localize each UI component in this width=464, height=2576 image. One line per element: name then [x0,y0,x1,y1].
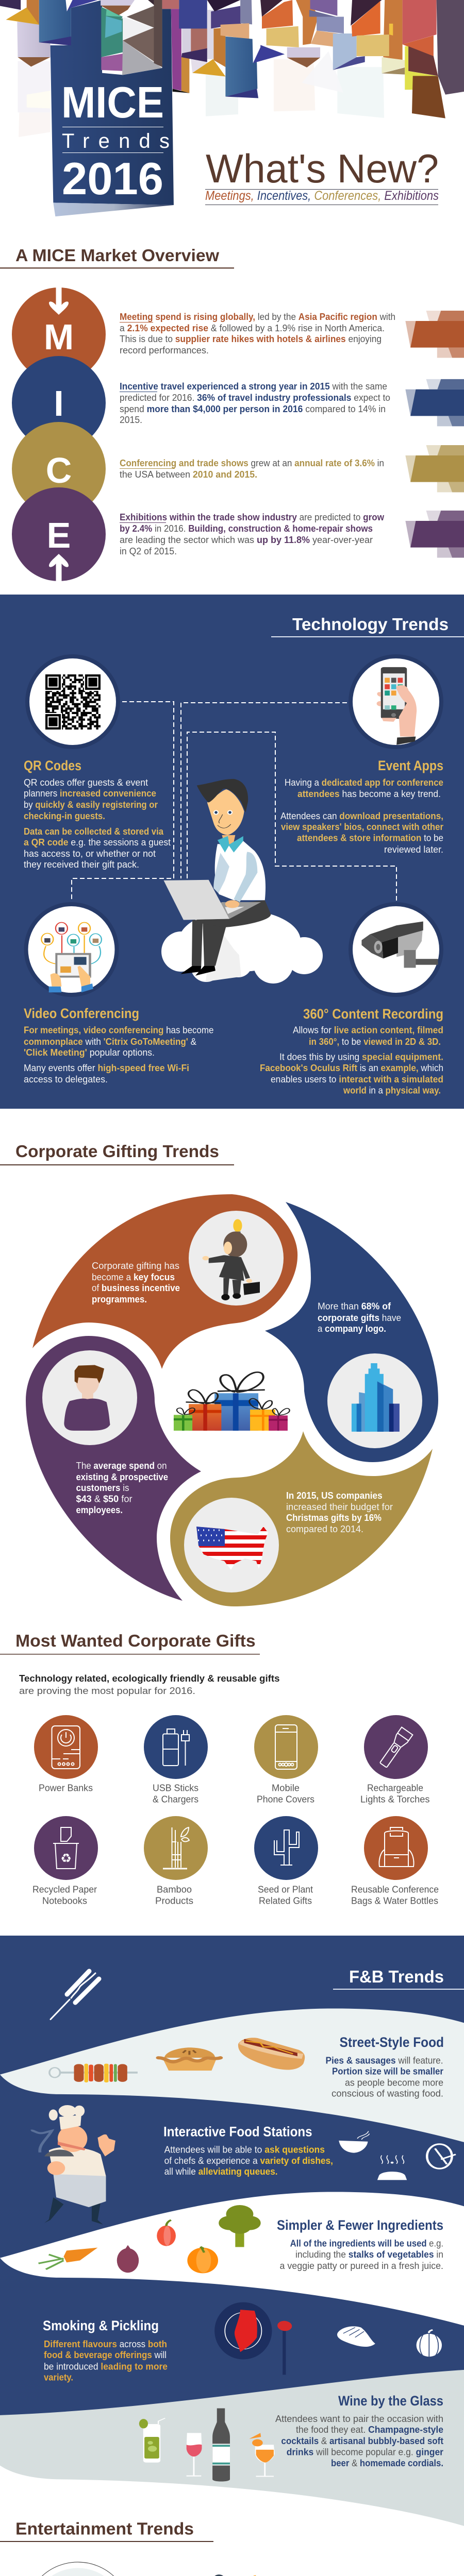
chart: corporate gifting swirl [26,1194,438,1606]
swirl segment: key focus: Corporate gifting has [92,1261,179,1271]
gift: Seed or Plant Related Gifts: Seed or Plant [258,1885,313,1895]
wave: wine by the glass: the food they eat. Champagne-style [296,2425,443,2435]
heading and text: QR Codes: a QR code e.g. the sessions a guest [24,837,171,848]
shirt [215,841,266,900]
swirl segment: average spend [26,1336,201,1601]
gift: Rechargeable Lights and Torches: Lights & Torches [360,1794,430,1805]
icon: corn dog [51,1971,99,2020]
text: incentives: Incentive travel experienced a strong year in 2015 with the same [120,381,387,392]
heading and text: QR Codes: planners increased convenience [24,788,156,799]
heading and text: Event Apps: reviewed later. [384,844,443,855]
text: conferences: Conferencing and trade shows grew at an annual rate of 3.6% in [120,458,384,468]
wave: wine by the glass: cocktails & artisanal bubbly-based soft [281,2436,443,2446]
icon: gift boxes [174,1372,290,1431]
text: Interactive Food Stations: Attendees will be able to ask questions [164,2145,325,2155]
badge: Hire Emerging Acts [25,2562,131,2576]
heading and text: Video Conferencing: commonplace with 'Citrix GoToMeeting' & [24,1037,196,1047]
heading and text: Video Conferencing: For meetings, video conferencing has become [24,1025,213,1036]
letter circle M: M [44,317,74,357]
heading and text: 360 Content Recording: enables users to interact with a simulated [271,1074,443,1084]
laptop [184,902,261,920]
heading and text: QR Codes: has access to, or whether or not [24,849,156,859]
ribbon M [405,311,464,358]
heading and text: 360 Content Recording: It does this by using special equipment. [279,1052,443,1062]
wave: wine by the glass: Attendees want to pair the occasion with [275,2414,443,2424]
gift: USB Sticks and Chargers: & Chargers [153,1794,198,1805]
icon: person with laptop on cloud [161,779,323,984]
gift: Bamboo Products: Products [155,1896,193,1906]
dashed connectors [72,702,396,903]
wave: simpler ingredients: including the stalks of vegetables in [295,2249,443,2260]
faint reflections below columns [18,51,384,137]
swirl segment: key focus: of business incentive [92,1283,180,1293]
head [207,789,244,835]
title: What's New?: Meetings, Incentives, Conferences, Exhibitions [205,189,439,203]
heading: Most Wanted Corporate Gifts: Most Wanted Corporate Gifts [15,1631,256,1650]
heading and text: QR Codes: they received their gift pack. [24,859,139,870]
swirl segment: company logo: corporate gifts have [318,1313,401,1323]
heading and text: Video Conferencing [24,1006,213,1084]
heading and text: Event Apps: view speakers' bios, connect with other [281,822,443,832]
gift: Seed or Plant Related Gifts: Related Gifts [259,1896,312,1906]
panel: entertainment trends [14,2562,449,2576]
ribbon C [405,445,464,493]
wave: wine by the glass [0,2370,464,2526]
text: meetings: Meeting spend is rising globally, led by the Asia Pacific region with [120,312,395,322]
gift: Recycled Paper Notebooks: ♻ [60,1851,72,1866]
text: exhibitions: Exhibitions within the trade show industry are predicted to grow [120,512,385,522]
text: conferences [120,458,384,480]
heading and text: Video Conferencing: Many events offer high-speed free Wi-Fi [24,1063,189,1073]
heading and text: Event Apps: Having a dedicated app for conference [285,777,443,788]
gift: Rechargeable Lights and Torches: Rechargeable [367,1783,423,1793]
gift: Recycled Paper Notebooks: Notebooks [42,1896,87,1906]
swirl segment: key focus [32,1194,297,1369]
text: meetings: a 2.1% expected rise & followed by a 1.9% rise in North America. [120,323,385,333]
heading and text: Event Apps: Event Apps [378,758,443,773]
gift: Bamboo Products [144,1816,208,1906]
icon: band [143,2574,287,2576]
ribbon I [405,379,464,426]
letter circle E [12,487,106,581]
swirl segment: key focus: become a key focus [92,1272,175,1282]
legs [192,920,203,966]
text: Smoking & Pickling: food & beverage offerings will [44,2350,167,2360]
heading and text: Video Conferencing: 'Click Meeting' popular options. [24,1047,155,1058]
heading and text: QR Codes [24,758,171,870]
heading and text: Event Apps: Attendees can download presentations, [280,811,443,821]
gift: USB Sticks and Chargers: USB Sticks [153,1783,198,1793]
icon: smoked meat and white food icons [214,2302,442,2375]
heading and text: Video Conferencing: Video Conferencing [24,1006,139,1021]
text: Interactive Food Stations: of chefs & experience a variety of dishes, [164,2156,333,2166]
wave: simpler ingredients [0,2192,464,2326]
heading: Entertainment Trends: Entertainment Trends [15,2519,194,2538]
background with wine wave edge [0,1936,464,2421]
heading: Corporate Gifting Trends: Corporate Gifting Trends [15,1142,219,1161]
title: MICE Trends 2016: MICE [61,78,164,127]
heading and text: 360 Content Recording: Facebook's Oculus Rift is an example, which [260,1063,443,1073]
panel: MICE market overview [12,287,464,581]
wave: wine by the glass: drinks will become popular e.g. ginger [287,2447,443,2458]
text: meetings [120,312,395,355]
text: Smoking & Pickling [43,2318,168,2383]
text: conferences: the USA between 2010 and 2015. [120,469,257,480]
text: Smoking & Pickling: Smoking & Pickling [43,2318,159,2333]
panel: technology trends [0,595,464,1109]
heading: Technology Trends: Technology Trends [292,615,449,634]
text: exhibitions: in Q2 of 2015. [120,546,177,556]
wave: street-style food: Pies & sausages will feature. [326,2056,443,2066]
gift: Reusable Conference Bags and Water Bottles [351,1816,439,1906]
title: MICE Trends 2016 [61,78,170,204]
swirl segment: Christmas gifts: In 2015, US companies [286,1490,383,1501]
gift: Seed or Plant Related Gifts [254,1816,318,1906]
text: exhibitions: are leading the sector which was up by 11.8% year-over-year [120,535,373,545]
swirl segment: key focus: programmes. [92,1294,147,1304]
letter circle C: C [46,450,72,490]
heading and text: 360 Content Recording: world in a physical way. [343,1086,441,1096]
icon: security camera [349,902,443,997]
letter circle M [12,287,106,381]
text: incentives: predicted for 2016. 36% of travel industry professionals expect to [120,393,390,403]
gift: Mobile Phone Covers: Phone Covers [257,1794,314,1805]
text: meetings: record performances. [120,345,209,355]
heading and text: 360 Content Recording: Allows for live action content, filmed [293,1025,443,1036]
text: gifts intro: are proving the most popular for 2016. [19,1686,195,1696]
wave: street-style food: Street-Style Food [339,2035,444,2050]
swirl segment: Christmas gifts: Christmas gifts by 16% [286,1513,382,1523]
text: Interactive Food Stations: all while alleviating queues. [164,2166,278,2177]
gift: Bamboo Products: Bamboo [157,1885,192,1895]
heading and text: Event Apps: attendees & store information to be [297,833,443,843]
swirl segment: Christmas gifts [170,1431,433,1606]
wave: wine by the glass: beer & homemade cordials. [331,2458,443,2468]
gift: Mobile Phone Covers: Mobile [272,1783,300,1793]
icon: white serving icons [339,2131,456,2180]
heading and text: 360 Content Recording: in 360°, to be viewed in 2D & 3D. [309,1037,441,1047]
title: MICE Trends 2016: Trends [62,130,170,152]
icon: QR code [25,654,120,749]
heading and text: QR Codes: QR Codes [24,758,81,773]
wave: wine by the glass: Wine by the Glass [338,2393,443,2409]
text: incentives: 2015. [120,415,142,425]
gift: Reusable Conference Bags and Water Bottles: Bags & Water Bottles [351,1896,438,1906]
text: Smoking & Pickling: variety. [44,2372,73,2383]
swirl segment: company logo: More than 68% of [318,1301,391,1312]
vegetable icons [39,2205,261,2273]
gift: Recycled Paper Notebooks [32,1816,98,1906]
letter circle I [12,356,106,450]
swirl segment: average spend: employees. [76,1505,123,1515]
icon: USA flag map [196,1527,268,1569]
gift: Power Banks: Power Banks [39,1783,93,1793]
wave: street-style food: Portion size will be smaller [332,2066,443,2077]
heading: F&B Trends: F&B Trends [349,1967,444,1986]
gift: Rechargeable Lights and Torches [360,1715,430,1805]
heading and text: Event Apps: attendees has become a key trend. [297,789,441,799]
heading and text: QR Codes: QR codes offer guests & event [24,777,148,788]
text: exhibitions [120,512,385,556]
swirl segment: average spend: customers is [76,1483,129,1493]
panel: F&B trends [0,1936,464,2421]
text: incentives [120,381,390,425]
text: gifts intro [19,1673,279,1696]
text: Smoking & Pickling: Different flavours across both [44,2339,167,2349]
gift: USB Sticks and Chargers [144,1715,208,1805]
swirl segment: Christmas gifts: compared to 2014. [286,1524,363,1534]
icon: drinks and bottle [139,2408,275,2482]
letter circle I: I [54,383,64,423]
swirl segment: average spend: $43 & $50 for [76,1494,132,1504]
gift: Power Banks [34,1715,98,1793]
icon: video conferencing [24,902,119,997]
gift: Reusable Conference Bags and Water Bottles: Reusable Conference [351,1885,439,1895]
title: What's New?: What's New? [206,146,439,191]
gift: Mobile Phone Covers [254,1715,318,1805]
text: exhibitions: by 2.4% in 2016. Building, construction & home-repair shows [120,523,373,534]
swirl segment: Christmas gifts: increased their budget for [286,1502,393,1512]
heading and text: Event Apps [280,758,443,855]
header: hanging paper city artwork [0,0,464,216]
text: incentives: spend more than $4,000 per person in 2016 compared to 14% in [120,404,386,414]
heading and text: Video Conferencing: access to delegates. [24,1074,108,1084]
heading: A MICE Market Overview: A MICE Market Overview [15,246,219,265]
wave: street-style food [0,2008,464,2142]
heading and text: QR Codes: by quickly & easily registering or [24,800,158,810]
wave: simpler ingredients: All of the ingredients will be used e.g. [290,2239,443,2249]
wave: street-style food: as people become more [345,2077,443,2088]
swirl segment: company logo [265,1202,438,1462]
swirl segment: average spend: The average spend on [76,1461,167,1471]
text: gifts intro: Technology related, ecologically friendly & reusable gifts [19,1673,279,1684]
wave: simpler ingredients: Simpler & Fewer Ingredients [277,2217,443,2233]
icon: chef with cloche [31,2105,115,2225]
text: Smoking & Pickling: be introduced leading to more [44,2362,168,2372]
letter circle C [12,422,106,516]
title: MICE Trends 2016: 2016 [62,153,163,204]
letter circle E: E [47,515,71,555]
heading and text: 360 Content Recording: 360° Content Recording [303,1006,443,1022]
text: Interactive Food Stations [163,2124,333,2177]
ribbon E [405,511,464,558]
icon: phone in hand [349,654,443,749]
swirl segment: average spend: existing & prospective [76,1472,168,1482]
text: Interactive Food Stations: Interactive Food Stations [163,2124,312,2139]
heading and text: QR Codes: checking-in guests. [24,811,105,821]
text: meetings: This is due to supplier rate hikes with hotels & airlines enjoying [120,334,382,344]
wave: street-style food: conscious of wasting food. [332,2089,443,2099]
cloud [161,910,323,984]
heading and text: 360 Content Recording [260,1006,443,1096]
gift: Recycled Paper Notebooks: Recycled Paper [32,1885,97,1895]
wave: simpler ingredients: a veggie patty or pureed in a fresh juice. [279,2261,443,2271]
food icons [49,2038,305,2082]
heading and text: QR Codes: Data can be collected & stored via [24,826,164,837]
swirl segment: company logo: a company logo. [318,1324,386,1334]
